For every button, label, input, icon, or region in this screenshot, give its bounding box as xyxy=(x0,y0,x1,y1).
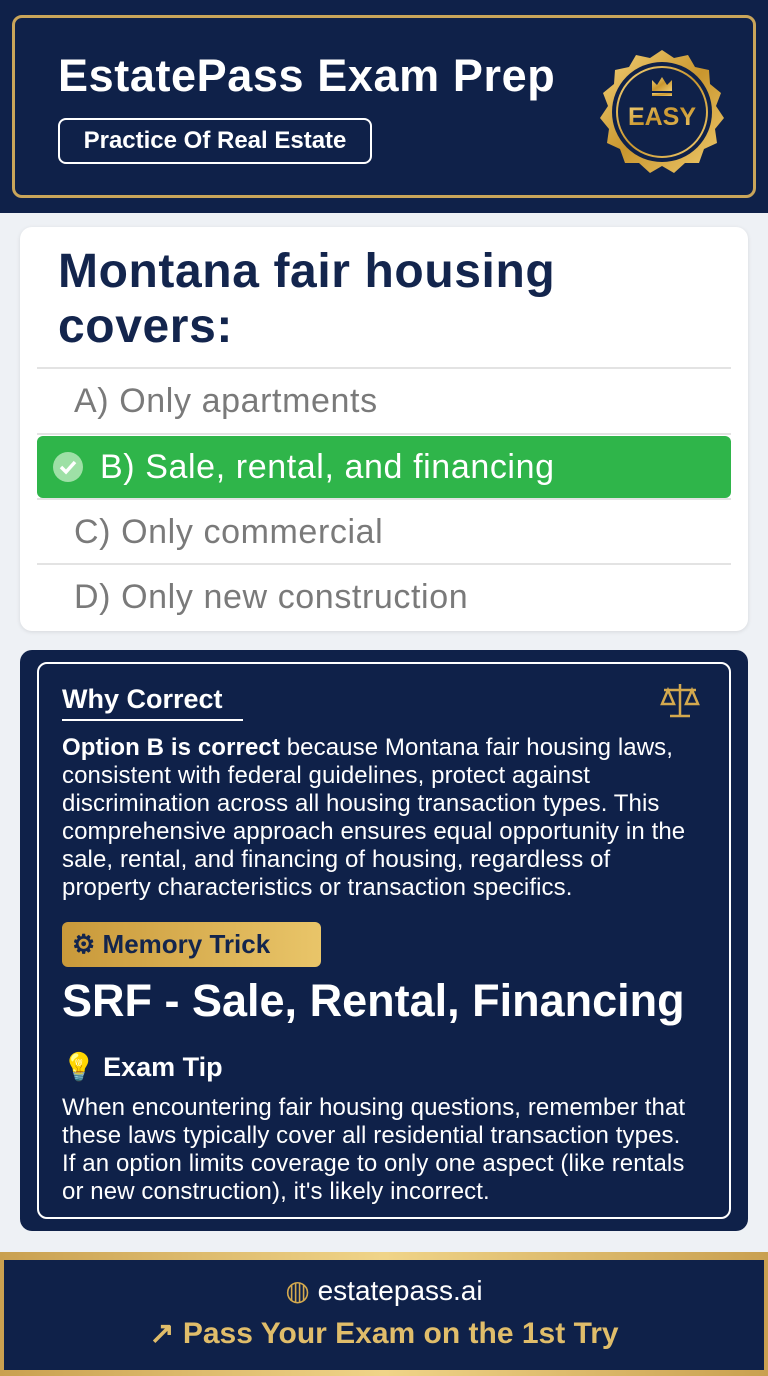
exam tip text: these laws typically cover all residential transaction types. xyxy=(62,1122,680,1149)
subtitle badge xyxy=(58,118,372,164)
footer tagline: ↗ Pass Your Exam on the 1st Try xyxy=(149,1317,619,1350)
memory trick badge xyxy=(62,922,321,967)
option B correct xyxy=(37,436,731,498)
heading: why correct: Why Correct xyxy=(62,684,223,714)
why correct text xyxy=(62,734,685,901)
option D: D) Only new construction xyxy=(74,578,468,616)
why correct text: property characteristics or transaction specifics. xyxy=(62,874,573,901)
exam tip text: When encountering fair housing questions, remember that xyxy=(62,1094,685,1121)
option A: A) Only apartments xyxy=(74,382,378,420)
icon: easy seal xyxy=(600,50,724,173)
memory trick badge: ⚙ Memory Trick xyxy=(72,929,270,959)
why correct text: sale, rental, and financing of housing, regardless of xyxy=(62,846,610,873)
header xyxy=(0,0,768,213)
exam tip heading: 💡 Exam Tip xyxy=(62,1052,223,1082)
why correct text: comprehensive approach ensures equal opportunity in the xyxy=(62,818,685,845)
exam tip text: If an option limits coverage to only one aspect (like rentals xyxy=(62,1150,684,1177)
icon: easy seal: EASY xyxy=(628,103,696,131)
question title: Montana fair housing xyxy=(58,245,555,298)
why correct text: consistent with federal guidelines, protect against xyxy=(62,762,590,789)
question title: covers: xyxy=(58,300,233,353)
subtitle badge: Practice Of Real Estate xyxy=(84,127,346,154)
why correct text: discrimination across all housing transaction types. This xyxy=(62,790,660,817)
footer xyxy=(0,1252,768,1376)
question card xyxy=(20,227,748,631)
option B correct: B) Sale, rental, and financing xyxy=(100,448,555,486)
exam tip text xyxy=(62,1094,685,1205)
title: EstatePass Exam Prep xyxy=(58,50,555,101)
explanation panel xyxy=(20,650,748,1231)
why correct text: Option B is correct because Montana fair housing laws, xyxy=(62,734,673,761)
header frame xyxy=(12,15,756,198)
icon: check xyxy=(53,452,83,482)
memory trick headline: SRF - Sale, Rental, Financing xyxy=(62,975,685,1026)
icon: scales xyxy=(660,684,700,718)
footer url: ◍ estatepass.ai xyxy=(285,1275,483,1306)
question title xyxy=(58,245,555,353)
option C: C) Only commercial xyxy=(74,513,383,551)
exam tip text: or new construction), it's likely incorrect. xyxy=(62,1178,490,1205)
